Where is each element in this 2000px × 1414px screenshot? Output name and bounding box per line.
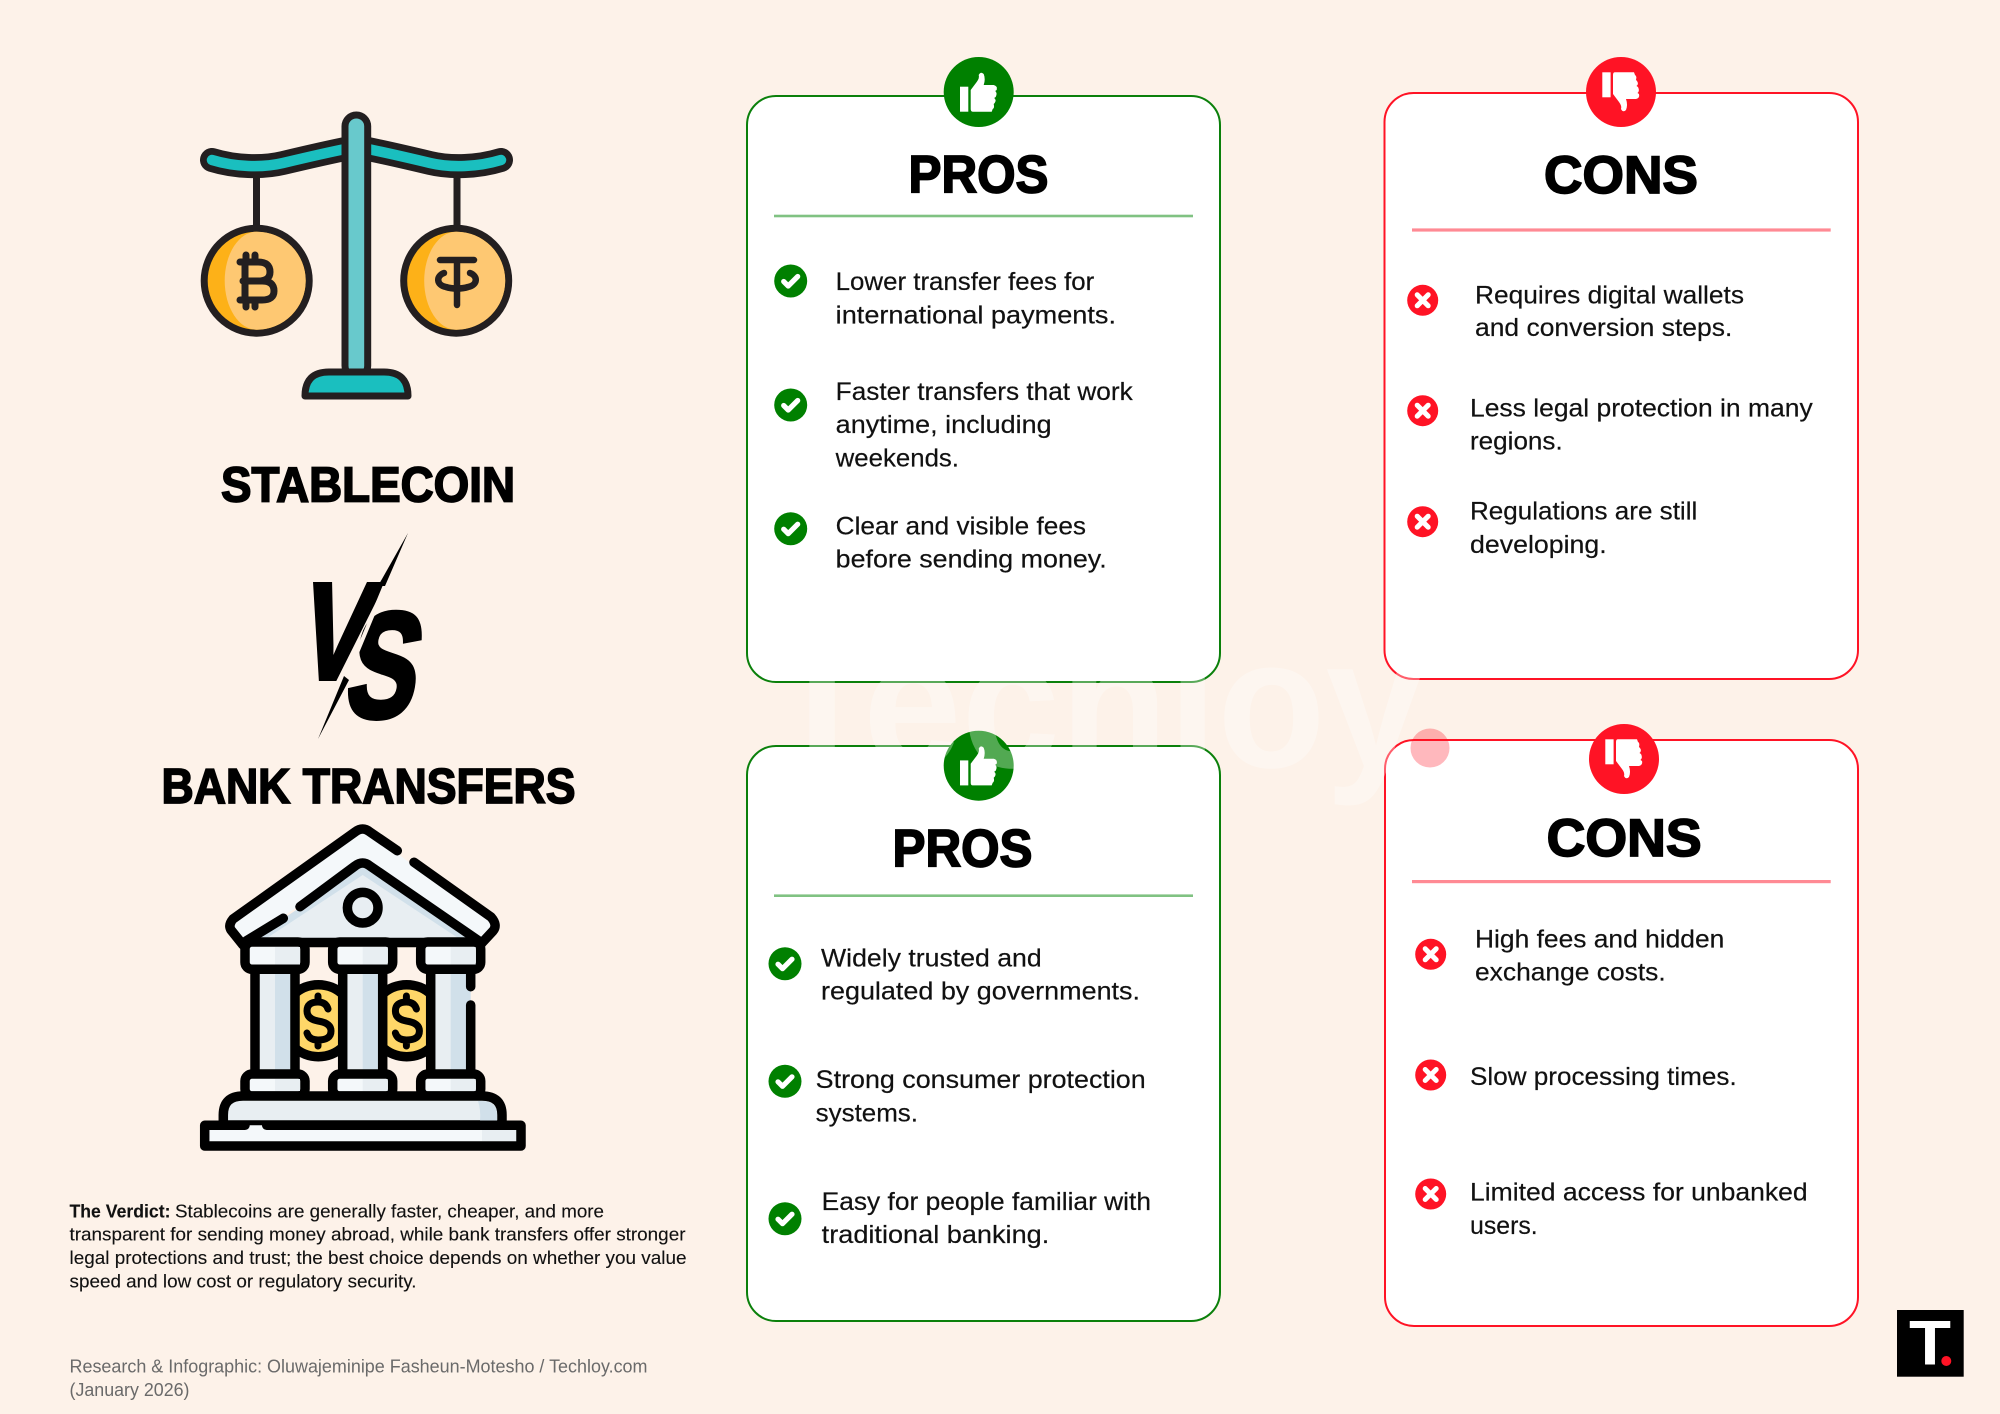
panel: stablecoin cons <box>1384 57 1858 679</box>
list item: visible fees: before sending money. <box>836 545 1107 573</box>
list item: regulations: developing. <box>1470 531 1607 559</box>
list item: faster transfers <box>774 378 1133 472</box>
text block: the verdict: speed and low cost or regulatory security. <box>70 1270 416 1291</box>
icon: balance scale with bitcoin and tether coins <box>204 115 509 396</box>
panel: bank transfer pros <box>747 731 1220 1321</box>
watermark: Techloy: Techloy <box>768 601 1424 807</box>
list item: digital wallets <box>1407 281 1744 342</box>
heading: bank transfers: BANK TRANSFERS <box>162 760 576 814</box>
list item: consumer protection: Strong consumer protection <box>816 1066 1146 1094</box>
list item: widely trusted: regulated by governments. <box>821 977 1140 1005</box>
icon: thumbs down <box>1589 724 1659 794</box>
text block: the verdict: Stablecoins are generally faster, cheaper, and more <box>175 1200 604 1221</box>
list item: consumer protection: systems. <box>816 1099 918 1127</box>
list item: lower fees: Lower transfer fees for <box>836 268 1094 296</box>
list item: high fees <box>1415 925 1724 987</box>
list item: legal protection: Less legal protection in many <box>1470 394 1813 422</box>
list item: lower fees: international payments. <box>836 301 1116 329</box>
heading: pros: PROS <box>892 820 1032 879</box>
list item: consumer protection <box>768 1065 1146 1127</box>
list item: widely trusted <box>768 945 1140 1005</box>
heading: pros: PROS <box>908 146 1048 205</box>
text block: the verdict: The Verdict: <box>70 1200 170 1221</box>
list item: digital wallets: Requires digital wallets <box>1475 281 1744 309</box>
list item: limited access: Limited access for unbanked <box>1470 1179 1808 1207</box>
list item: visible fees <box>774 512 1107 573</box>
icon: thumbs up <box>944 57 1014 127</box>
panel: bank transfer cons <box>1385 724 1858 1326</box>
list item: high fees: High fees and hidden <box>1475 925 1724 953</box>
text block: the verdict <box>70 1200 686 1291</box>
heading: stablecoin: STABLECOIN <box>221 458 515 512</box>
list item: digital wallets: and conversion steps. <box>1475 314 1732 342</box>
list item: slow processing: Slow processing times. <box>1470 1063 1737 1091</box>
icon: versus mark <box>286 533 436 749</box>
heading: cons: CONS <box>1544 146 1698 205</box>
icon: thumbs up <box>944 731 1014 801</box>
text block: credit: Research & Infographic: Oluwajeminipe Fasheun-Motesho / Techloy.com <box>70 1356 648 1376</box>
list item: faster transfers: anytime, including <box>836 411 1052 439</box>
list item: regulations <box>1407 498 1697 559</box>
list item: easy for people: traditional banking. <box>822 1221 1049 1249</box>
text block: credit <box>70 1356 648 1400</box>
list item: limited access <box>1415 1178 1808 1240</box>
text block: the verdict: transparent for sending money abroad, while bank transfers offer stronger <box>70 1224 686 1245</box>
icon: versus mark: V <box>286 555 390 709</box>
list item: easy for people <box>768 1188 1151 1249</box>
list item: limited access: users. <box>1470 1212 1538 1240</box>
panel: stablecoin pros <box>747 57 1220 682</box>
text block: credit: (January 2026) <box>70 1380 190 1400</box>
list item: lower fees <box>774 264 1116 329</box>
icon: bank building with dollar coins <box>205 828 521 1146</box>
icon: thumbs down <box>1586 57 1656 127</box>
list item: visible fees: Clear and visible fees <box>836 512 1086 540</box>
logo: Techloy T <box>1897 1309 1964 1379</box>
list item: easy for people: Easy for people familiar with <box>822 1188 1151 1216</box>
list item: legal protection: regions. <box>1470 428 1563 456</box>
text block: the verdict: legal protections and trust; the best choice depends on whether you value <box>70 1247 686 1268</box>
list item: faster transfers: Faster transfers that work <box>836 378 1133 406</box>
list item: legal protection <box>1407 394 1813 456</box>
list item: regulations: Regulations are still <box>1470 498 1697 526</box>
icon: versus mark: S <box>336 582 436 749</box>
list item: widely trusted: Widely trusted and <box>821 945 1042 973</box>
list item: faster transfers: weekends. <box>835 444 959 472</box>
logo: Techloy T: T <box>1909 1309 1951 1379</box>
heading: cons: CONS <box>1547 809 1702 868</box>
list item: high fees: exchange costs. <box>1475 959 1666 987</box>
